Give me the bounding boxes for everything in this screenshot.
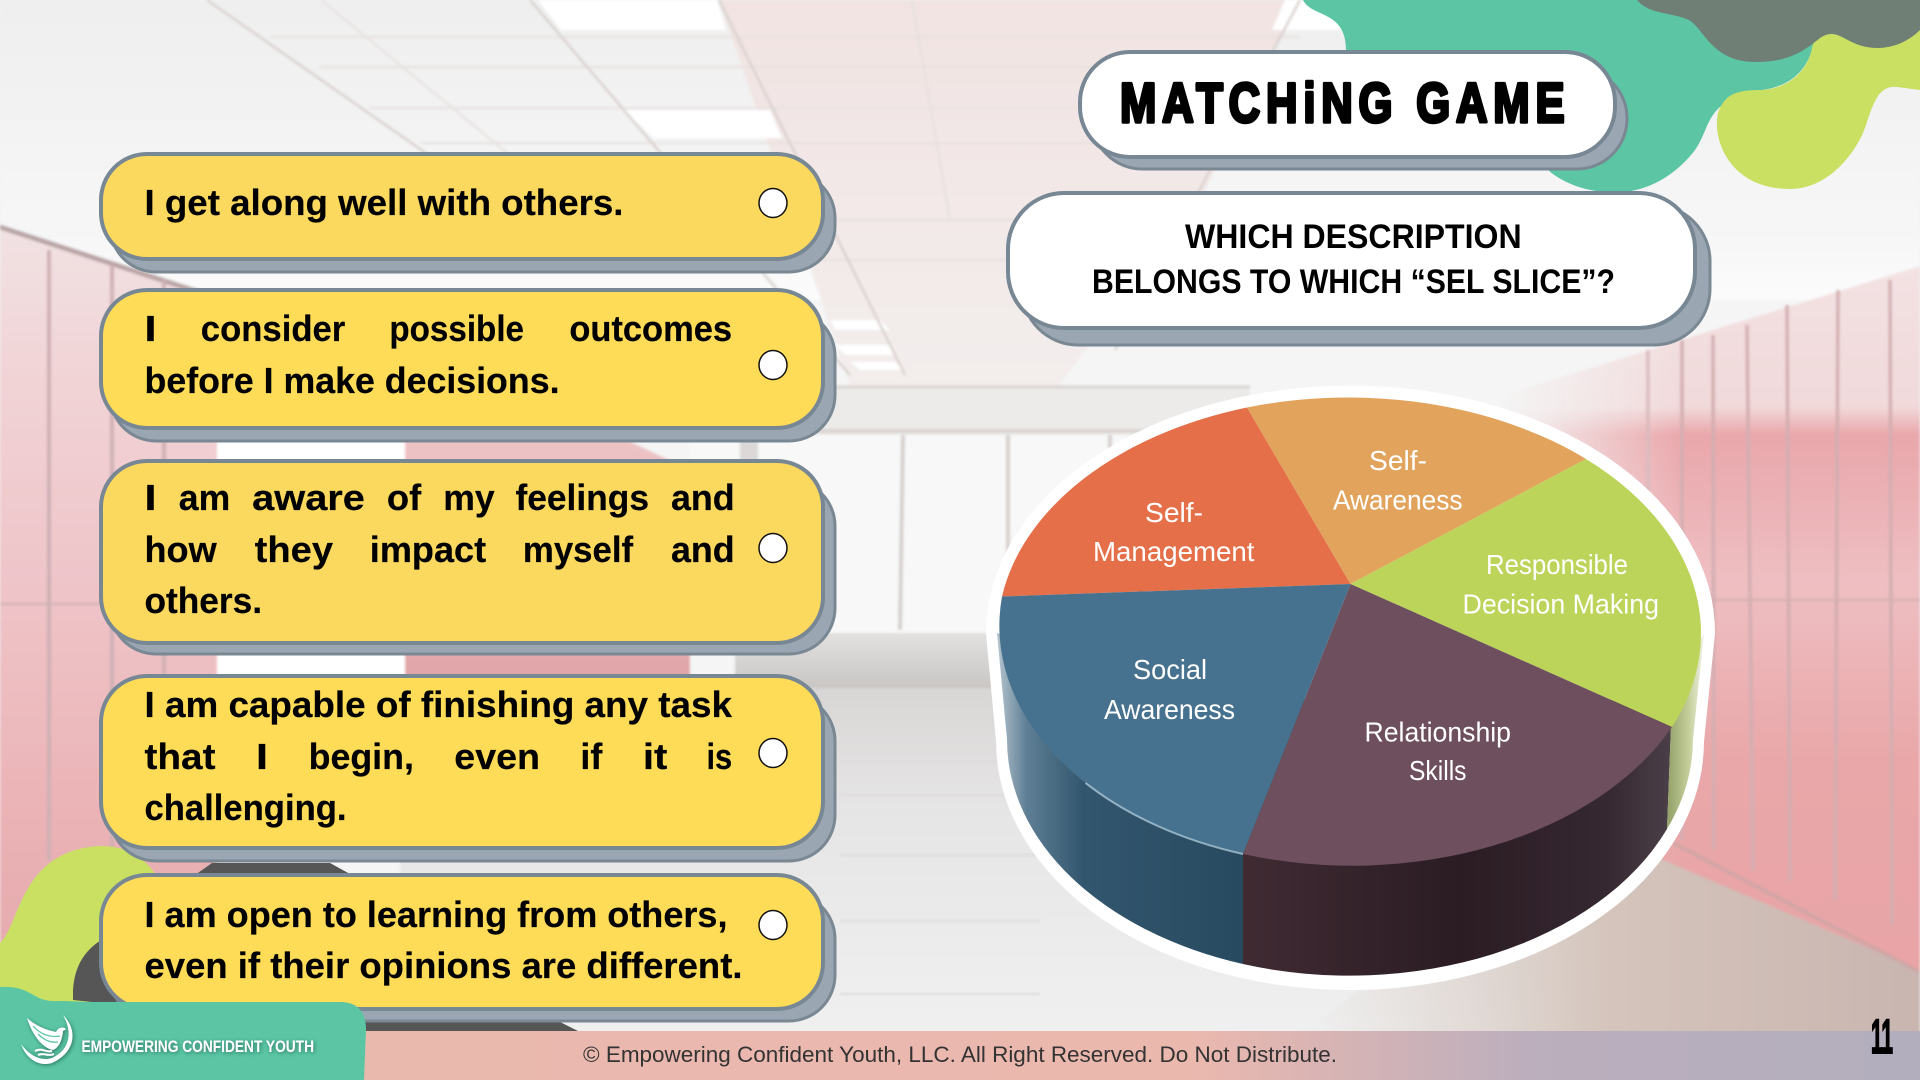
card 4: I am capable of finishing: begin, — [309, 736, 414, 777]
blob: top right grey — [1637, 0, 1920, 62]
card 5: I am open to learning: I am open to learning from others, — [144, 894, 728, 935]
card 3: I am aware of my feelings: I — [144, 477, 156, 518]
card 3: I am aware of my feelings: and — [671, 477, 735, 518]
slice: relationship skills: Relationship — [1364, 716, 1511, 747]
card 4: I am capable of finishing — [101, 676, 835, 861]
blob: top right green — [1303, 0, 1820, 192]
question box: WHICH DESCRIPTION — [1185, 218, 1522, 256]
footer band — [0, 1031, 1920, 1080]
lockers left — [0, 227, 217, 1040]
brand name: EMPOWERING CONFIDENT YOUTH — [82, 1037, 314, 1056]
lockers right — [1500, 266, 1920, 972]
card 4: I am capable of finishing: it — [643, 736, 667, 777]
slice: self-management — [1002, 408, 1350, 596]
card 3: I am aware of my feelings: myself — [523, 529, 634, 570]
card 4: I am capable of finishing: is — [706, 736, 732, 777]
card 2: I consider possible outcomes: I — [144, 308, 156, 349]
card 1: I get along well with others: I get along well with others. — [144, 182, 624, 223]
pie white outline — [997, 397, 1704, 979]
card 4: I am capable of finishing: I am capable of finishing any task — [144, 684, 733, 725]
slice: self-awareness: Self- — [1369, 445, 1427, 476]
back wall — [690, 385, 1250, 435]
title: Matching Game: MATCHiNG GAME — [1120, 72, 1565, 134]
slice: social awareness: Awareness — [1104, 694, 1235, 725]
slice: relationship skills: Skills — [1409, 755, 1466, 786]
card 3: I am aware of my feelings: of — [387, 477, 422, 518]
card 2: I consider possible outcomes: consider — [201, 308, 345, 349]
pie side: relationship skills — [1243, 700, 1672, 976]
card 2: I consider possible outcomes: before I make decisions. — [144, 360, 560, 401]
card 3: I am aware of my feelings: how — [144, 529, 218, 570]
question box: BELONGS TO WHICH “SEL SLICE”? — [1092, 263, 1615, 301]
card 4: I am capable of finishing: even — [454, 736, 540, 777]
question box — [1008, 193, 1710, 345]
slice: responsible decision making: Decision Making — [1462, 589, 1659, 620]
lockers behind the cards — [405, 432, 690, 690]
slice: social awareness — [999, 584, 1350, 854]
card 3: I am aware of my feelings: others. — [144, 580, 262, 621]
slice: responsible decision making — [1350, 459, 1701, 727]
card 4: I am capable of finishing: if — [580, 736, 603, 777]
pie side: responsible decision making — [1667, 633, 1704, 829]
card 5: I am open to learning: even if their opinions are different. — [144, 945, 742, 986]
blob: top right lime — [1717, 30, 1920, 189]
card 2: I consider possible outcomes: possible — [389, 308, 524, 349]
card 3: I am aware of my feelings: they — [255, 529, 333, 570]
slice: self-management: Self- — [1145, 497, 1203, 528]
bottom left logo tab — [0, 987, 366, 1080]
blob: bottom left lime — [0, 846, 170, 1010]
slice: self-awareness: Awareness — [1333, 485, 1462, 516]
copyright: © Empowering Confident Youth, LLC. All Right Reserved. Do Not Distribute. — [583, 1042, 1337, 1067]
card 3: I am aware of my feelings: impact — [370, 529, 486, 570]
title: Matching Game — [1080, 52, 1627, 169]
card 2: I consider possible outcomes: outcomes — [569, 308, 732, 349]
slice: responsible decision making: Responsible — [1486, 549, 1628, 580]
card 4: I am capable of finishing: I — [256, 736, 268, 777]
card 3: I am aware of my feelings: and — [671, 529, 735, 570]
card 3: I am aware of my feelings: my — [443, 477, 495, 518]
slice: relationship skills — [1243, 584, 1672, 866]
card 3: I am aware of my feelings: am — [179, 477, 230, 518]
slice: self-awareness — [1247, 398, 1586, 584]
card 3: I am aware of my feelings: feelings — [516, 477, 649, 518]
card 2: I consider possible outcomes — [101, 290, 835, 441]
slice: social awareness: Social — [1133, 654, 1207, 685]
icon: bird logo — [21, 1015, 73, 1064]
card 3: I am aware of my feelings: aware — [252, 477, 365, 518]
3D pie chart — [997, 397, 1704, 979]
pie side: social awareness — [997, 633, 1243, 964]
pie rim highlight — [999, 596, 1243, 854]
card 5: I am open to learning — [101, 875, 835, 1021]
slice: self-management: Management — [1093, 536, 1255, 567]
card 1: I get along well with others — [101, 154, 835, 272]
card 3: I am aware of my feelings — [101, 461, 835, 654]
card 4: I am capable of finishing: that — [144, 736, 216, 777]
card 4: I am capable of finishing: challenging. — [144, 787, 346, 828]
blob: bottom left dark — [73, 863, 578, 1031]
